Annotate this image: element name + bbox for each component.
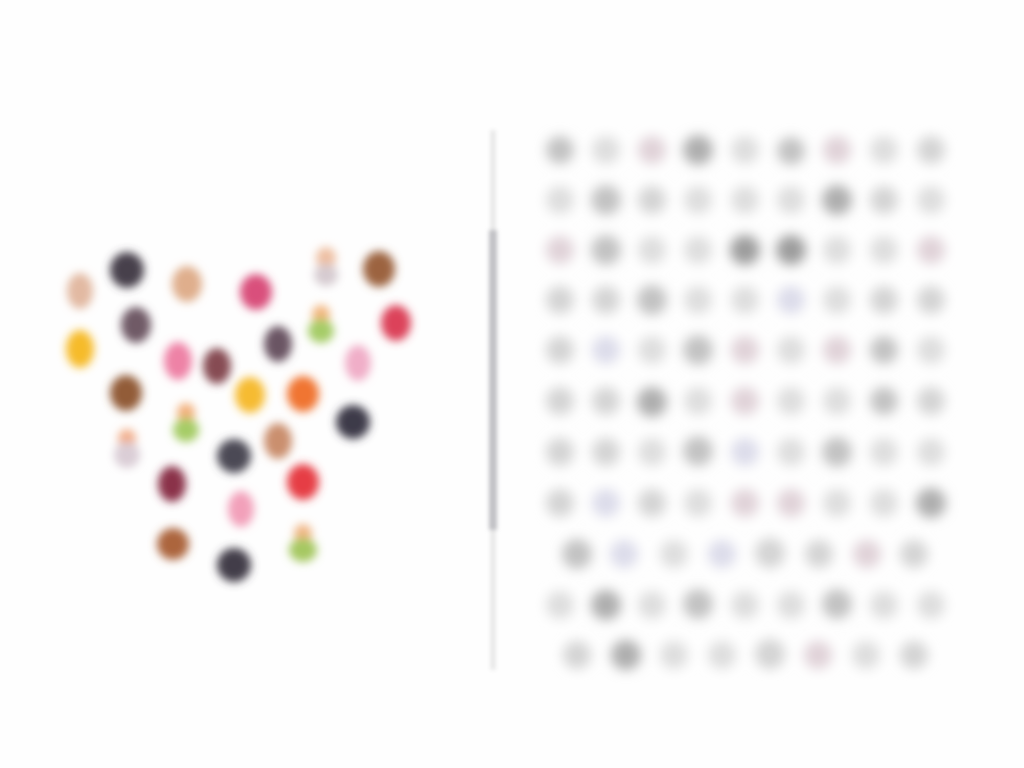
figure 9 <box>381 305 411 341</box>
row 9 <box>563 539 927 568</box>
row 2 <box>547 186 944 214</box>
figure 28 <box>289 524 317 562</box>
figure 4 <box>240 274 272 310</box>
figure 22 <box>264 423 292 459</box>
row 5 <box>547 336 944 364</box>
figure 1 <box>67 273 93 309</box>
row 6 <box>547 388 944 416</box>
row 11 <box>564 640 927 669</box>
row 8 <box>547 489 945 517</box>
figure 5 <box>314 247 338 286</box>
figure 11 <box>164 342 192 380</box>
figure 21 <box>217 439 251 473</box>
figure 8 <box>308 305 334 343</box>
row 1 <box>547 136 944 164</box>
figure 6 <box>363 251 395 287</box>
figure 12 <box>203 348 231 384</box>
figure 2 <box>110 252 144 288</box>
row 3 <box>547 236 944 264</box>
figure 7 <box>121 307 151 343</box>
figure 13 <box>264 326 292 362</box>
figure 26 <box>157 528 189 560</box>
divider line <box>489 130 497 670</box>
figure 14 <box>345 345 371 381</box>
figure 23 <box>158 466 186 502</box>
panel: colored figures <box>66 247 411 582</box>
figure 15 <box>110 375 142 411</box>
row 10 <box>547 590 944 619</box>
row 7 <box>547 437 944 466</box>
figure 20 <box>114 429 140 468</box>
figure 19 <box>173 403 199 442</box>
figure 17 <box>287 376 319 412</box>
figure 24 <box>287 464 319 500</box>
panel: gray dot grid <box>547 136 945 669</box>
figure 10 <box>66 330 94 368</box>
figure 18 <box>336 405 370 439</box>
figure 3 <box>172 266 202 302</box>
figure 16 <box>235 377 265 413</box>
figure 25 <box>228 491 254 527</box>
row 4 <box>547 286 944 314</box>
figure 27 <box>217 548 251 582</box>
